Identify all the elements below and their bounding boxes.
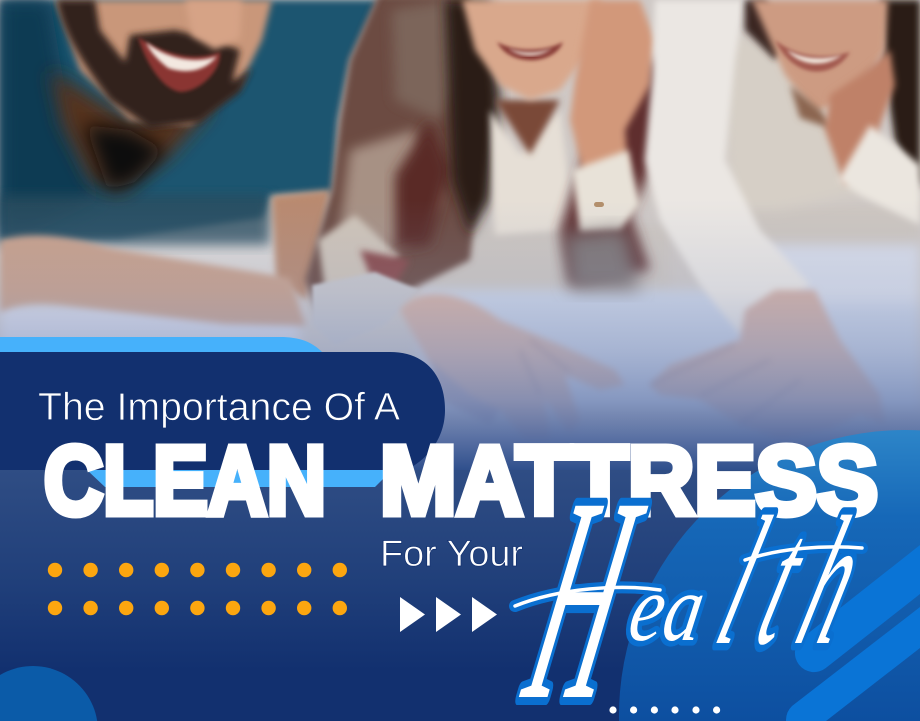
- letters white: lth: [699, 479, 885, 684]
- finger gaps: [520, 340, 800, 424]
- disc stripe top: [795, 545, 920, 672]
- script word: health: [504, 437, 885, 721]
- bottom-left circle: [0, 666, 97, 721]
- beard: [57, 0, 252, 128]
- child: [302, 0, 658, 308]
- photo: family on a mattress: [0, 0, 920, 500]
- upper arm: [272, 190, 330, 300]
- sweater arm: [645, 0, 810, 335]
- nose: [185, 0, 242, 50]
- forearm: [0, 235, 306, 326]
- smile: [775, 40, 850, 72]
- mouth: [138, 37, 220, 92]
- swash outline: [515, 547, 862, 606]
- light blue bar top: [0, 337, 322, 352]
- lower blue background: [0, 470, 920, 721]
- shirt: [0, 0, 378, 240]
- hands on mattress: [400, 286, 881, 414]
- title line 1: The Importance Of A: [38, 386, 400, 429]
- letters white: [504, 437, 885, 721]
- for your: For Your: [380, 533, 523, 574]
- hand: [570, 0, 655, 180]
- headline: clean mattress: MATTRESS: [380, 426, 878, 535]
- arrows: [400, 597, 497, 632]
- photo fade into blue: [0, 200, 920, 500]
- plaid shirt: [305, 0, 480, 320]
- face: [462, 0, 602, 100]
- disc stripe bottom: [786, 607, 920, 721]
- swash white: [515, 547, 862, 606]
- torso: [720, 30, 870, 210]
- mattress back: [0, 234, 920, 397]
- hair: [445, 0, 500, 235]
- face: [55, 0, 272, 125]
- smile: [497, 42, 563, 60]
- letters outline: [504, 437, 885, 721]
- letters outline: lth: [699, 479, 885, 684]
- neck shadow: [790, 85, 835, 130]
- letters outline: ea: [622, 556, 713, 661]
- light blue bar behind headline: [87, 470, 392, 487]
- sleeve cuff: [572, 150, 640, 232]
- right disc: [619, 430, 920, 721]
- face: [752, 0, 888, 112]
- headline: clean mattress: [44, 426, 878, 535]
- sleeve: [838, 125, 920, 225]
- neck: [50, 70, 215, 192]
- man: [0, 0, 378, 326]
- letters white: ea: [622, 556, 713, 661]
- white tee: [490, 110, 568, 235]
- red plaid: [560, 60, 668, 285]
- cuff: [310, 270, 418, 324]
- dark rounded title panel: [0, 352, 445, 470]
- orange dots: [48, 563, 347, 615]
- hand: [825, 50, 895, 185]
- small white dots: [609, 706, 720, 714]
- woman: [645, 0, 920, 335]
- hair: [880, 0, 920, 190]
- headline: clean mattress: CLEAN: [44, 426, 326, 535]
